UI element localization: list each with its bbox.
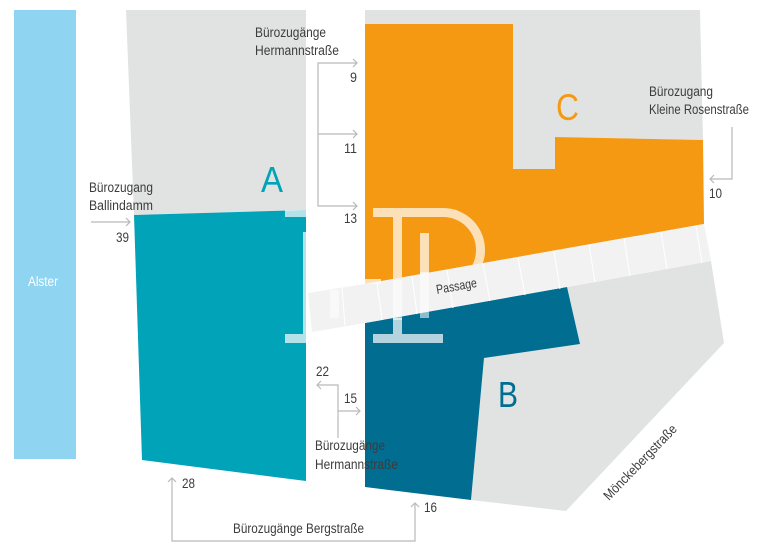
- building label B: B: [498, 374, 518, 415]
- callout: entrances Bergstrasse: 28: [182, 475, 195, 491]
- callout: entrance Kleine Rosenstrasse: Kleine Rosenstraße: [649, 102, 749, 117]
- callout: entrances Hermannstrasse top: Hermannstraße: [255, 43, 339, 58]
- callout: entrances Hermannstrasse top: 13: [344, 210, 357, 226]
- callout: entrances Hermannstrasse top: 11: [344, 140, 357, 156]
- callout: entrances Hermannstrasse bottom: Bürozugänge: [315, 438, 385, 453]
- callout: entrances Hermannstrasse bottom: [315, 363, 398, 472]
- callout: entrances Hermannstrasse top: 9: [350, 69, 357, 85]
- callout: entrance Kleine Rosenstrasse: 10: [709, 185, 722, 201]
- callout: entrance Ballindamm: Bürozugang: [89, 180, 153, 195]
- panel: building A: [134, 210, 306, 481]
- building label A: A: [261, 159, 283, 200]
- logo watermark: [285, 208, 485, 343]
- panel: grey area C: [365, 10, 703, 169]
- callout: entrances Hermannstrasse bottom: 15: [344, 390, 357, 406]
- street label Moenckebergstrasse: Mönckebergstraße: [600, 421, 680, 503]
- callout: entrance Ballindamm: Ballindamm: [89, 198, 153, 213]
- panel: building C: [365, 24, 704, 284]
- panel: grey area A: [126, 10, 306, 215]
- panel: passage: [308, 224, 711, 332]
- panel: Alster: [14, 10, 76, 459]
- panel: grey area B: [471, 261, 724, 511]
- panel: building B: [365, 287, 580, 500]
- callout: entrance Ballindamm: 39: [116, 229, 129, 245]
- callout: entrance Kleine Rosenstrasse: Bürozugang: [649, 84, 713, 99]
- panel: passage: Passage: [435, 275, 478, 297]
- building label C: C: [556, 87, 579, 128]
- callout: entrances Hermannstrasse top: [255, 25, 357, 226]
- callout: entrances Hermannstrasse bottom: 22: [316, 363, 329, 379]
- callout: entrances Hermannstrasse top: Bürozugänge: [255, 25, 326, 40]
- callout: entrance Kleine Rosenstrasse: [649, 84, 749, 201]
- callout: entrances Bergstrasse: Bürozugänge Bergstraße: [233, 521, 364, 536]
- callout: entrances Hermannstrasse bottom: Hermannstraße: [315, 457, 398, 472]
- panel: Alster: Alster: [28, 274, 58, 289]
- callout: entrance Ballindamm: [89, 180, 153, 245]
- callout: entrances Bergstrasse: 16: [424, 499, 437, 515]
- callout: entrances Bergstrasse: [168, 475, 437, 541]
